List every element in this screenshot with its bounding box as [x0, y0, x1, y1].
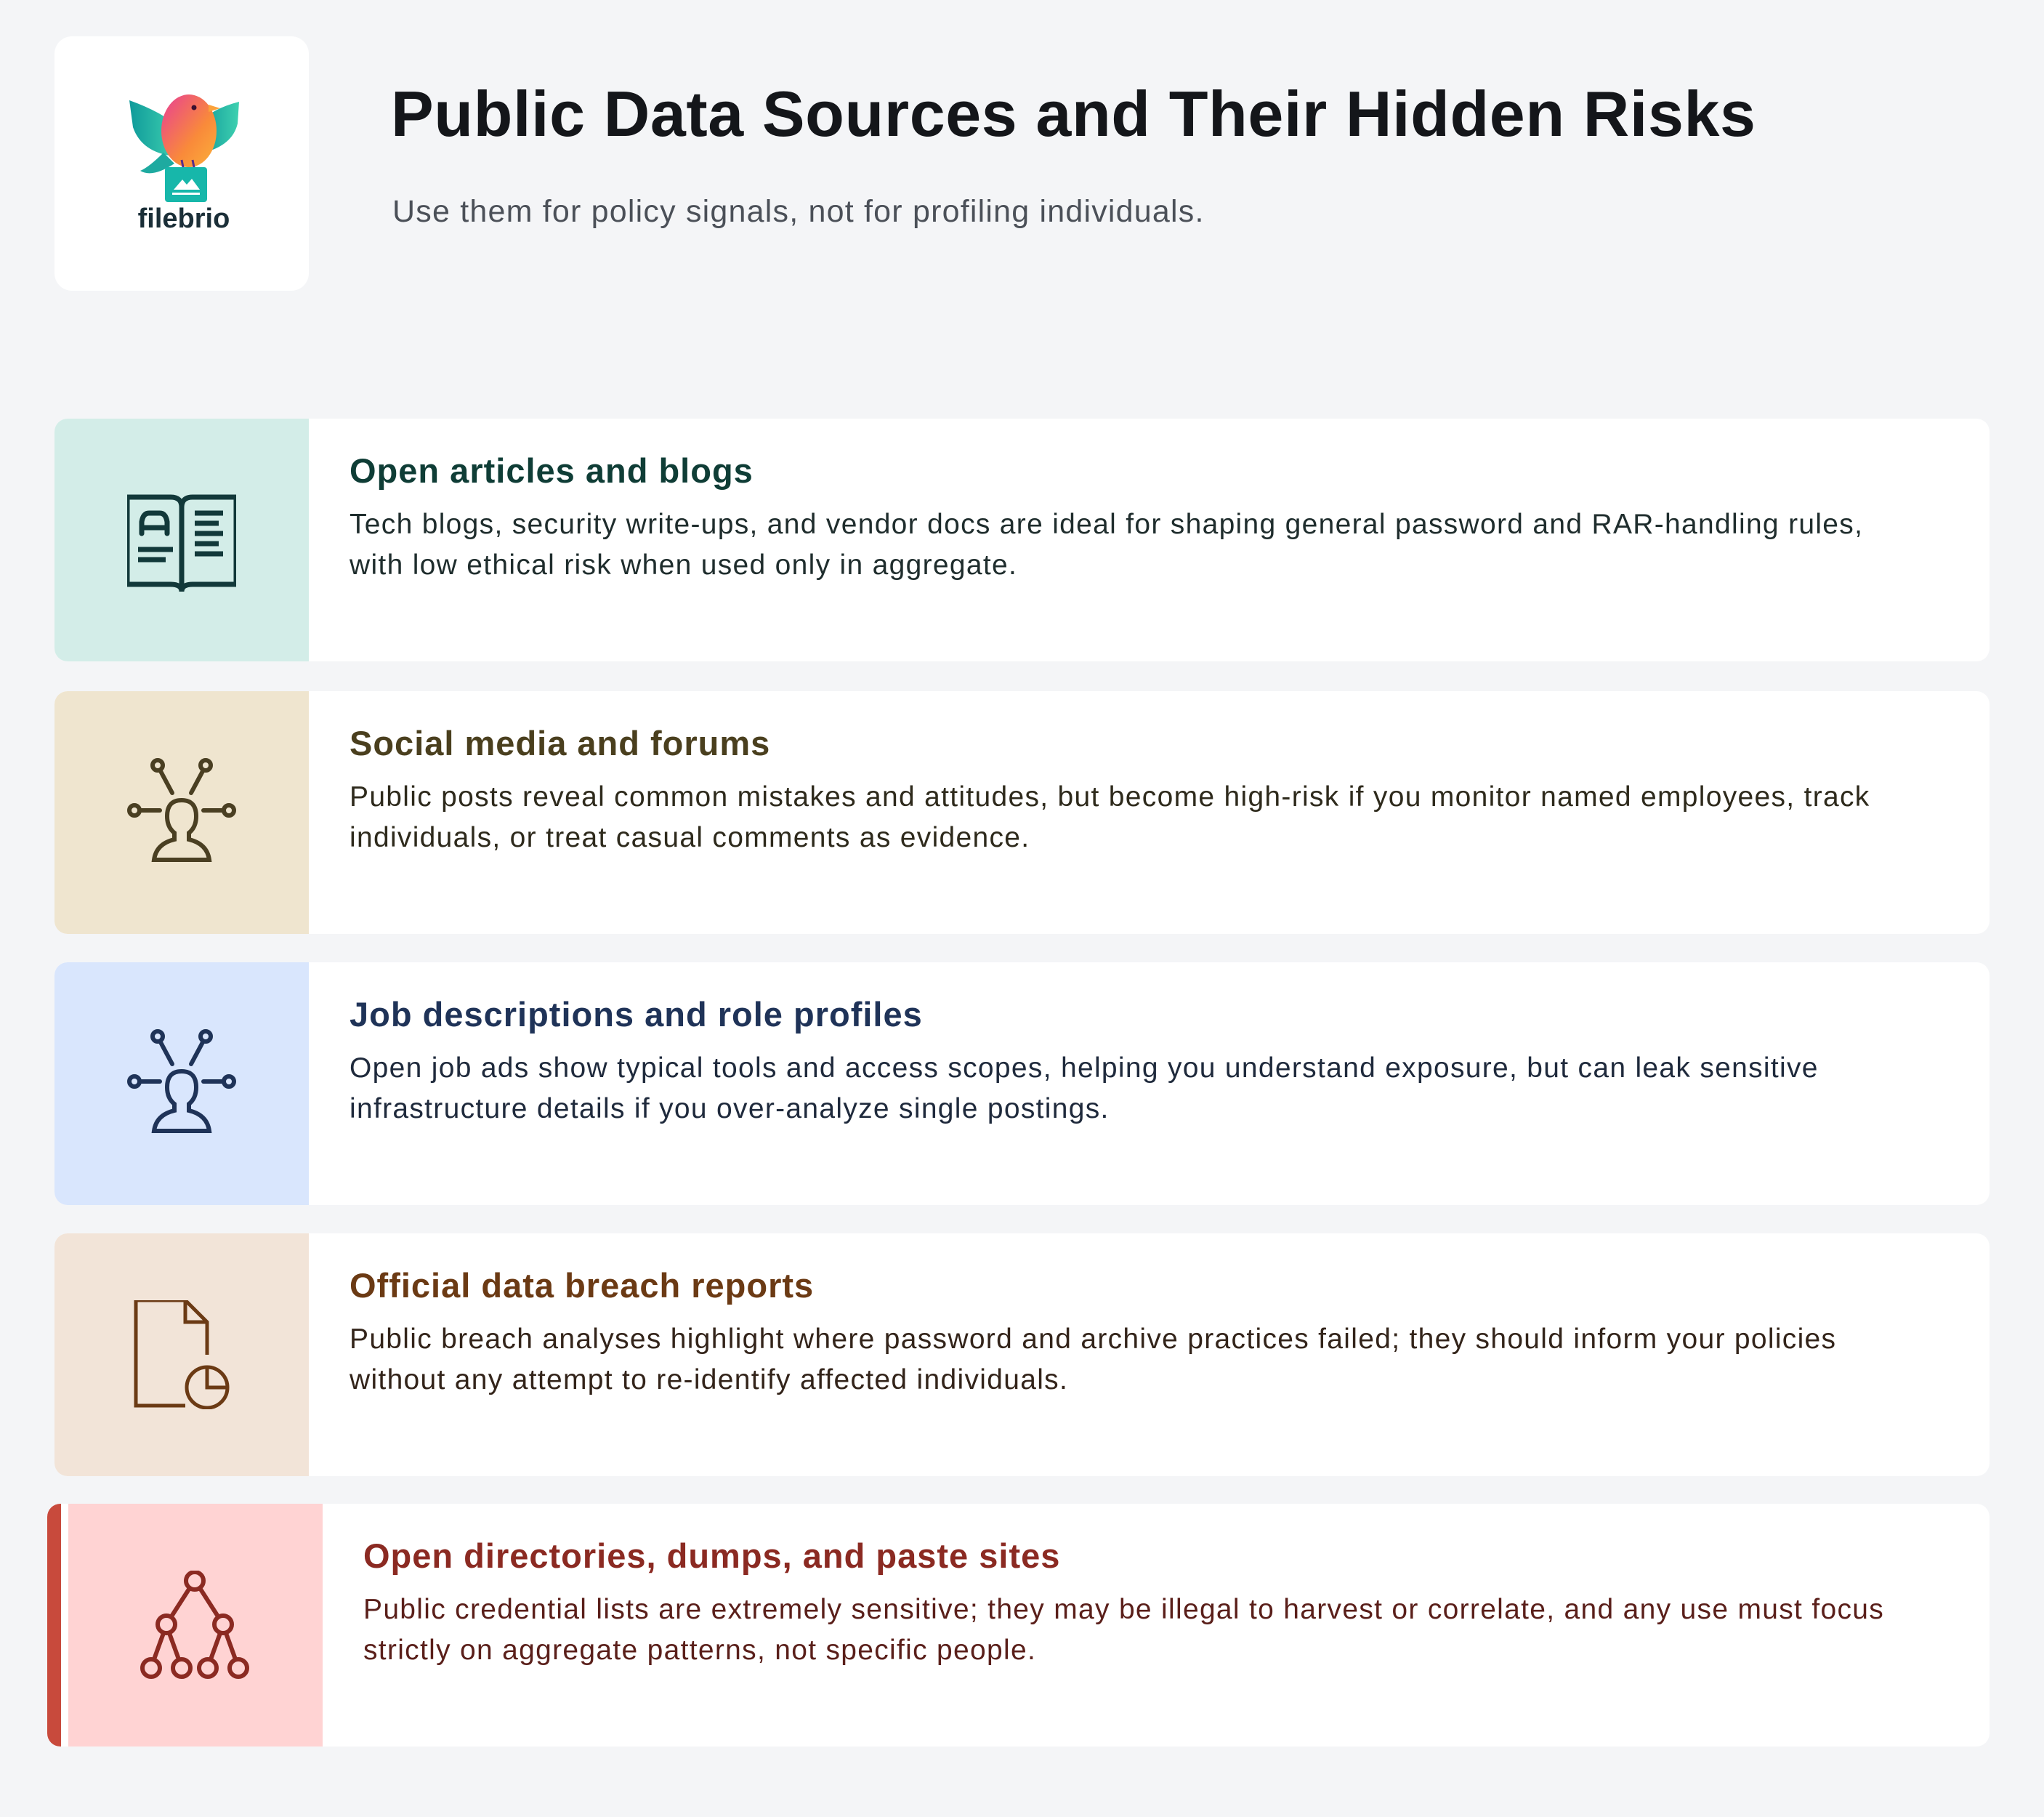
card: job descriptions: [54, 962, 1990, 1205]
card: open directories: [47, 1504, 1990, 1747]
heading: Official data breach reports: [350, 1266, 814, 1305]
title: Public Data Sources and Their Hidden Risks: [391, 78, 1756, 150]
card: open articles: [54, 419, 1990, 661]
body: Public posts reveal common mistakes and attitudes, but become high-risk if you monitor named employees, track: [350, 781, 1870, 813]
body: Open job ads show typical tools and access scopes, helping you understand exposure, but can leak sensitive: [350, 1052, 1819, 1084]
body: [350, 509, 1863, 581]
logo card: [54, 36, 309, 291]
body: with low ethical risk when used only in aggregate.: [350, 549, 1017, 581]
heading: Social media and forums: [350, 724, 770, 762]
icon panel: person network: [54, 962, 309, 1205]
icon panel: person network: [54, 691, 309, 934]
body: [350, 781, 1870, 853]
heading: Open directories, dumps, and paste sites: [363, 1536, 1060, 1575]
icon panel: book: [54, 419, 309, 661]
logo: bird on file: filebrio: [138, 204, 230, 234]
card: social media: [54, 691, 1990, 934]
heading: Job descriptions and role profiles: [350, 995, 923, 1034]
icon panel: tree: [68, 1504, 323, 1747]
body: Public breach analyses highlight where password and archive practices failed; they should inform your policies: [350, 1324, 1836, 1355]
body: strictly on aggregate patterns, not specific people.: [363, 1635, 1036, 1666]
icon panel: document with chart: [54, 1233, 309, 1476]
body: infrastructure details if you over-analyze single postings.: [350, 1093, 1110, 1124]
card: breach reports: [54, 1233, 1990, 1476]
body: without any attempt to re-identify affected individuals.: [350, 1364, 1068, 1395]
body: [363, 1594, 1884, 1666]
body: Public credential lists are extremely sensitive; they may be illegal to harvest or correlate, and any use must focus: [363, 1594, 1884, 1625]
body: [350, 1324, 1836, 1395]
body: [350, 1052, 1819, 1124]
subtitle: Use them for policy signals, not for profiling individuals.: [392, 194, 1205, 229]
accent bar: [47, 1504, 61, 1748]
body: Tech blogs, security write-ups, and vendor docs are ideal for shaping general password and RAR-handling rules,: [350, 509, 1863, 540]
logo: bird on file: [129, 94, 239, 234]
body: individuals, or treat casual comments as evidence.: [350, 822, 1030, 853]
heading: Open articles and blogs: [350, 451, 754, 490]
